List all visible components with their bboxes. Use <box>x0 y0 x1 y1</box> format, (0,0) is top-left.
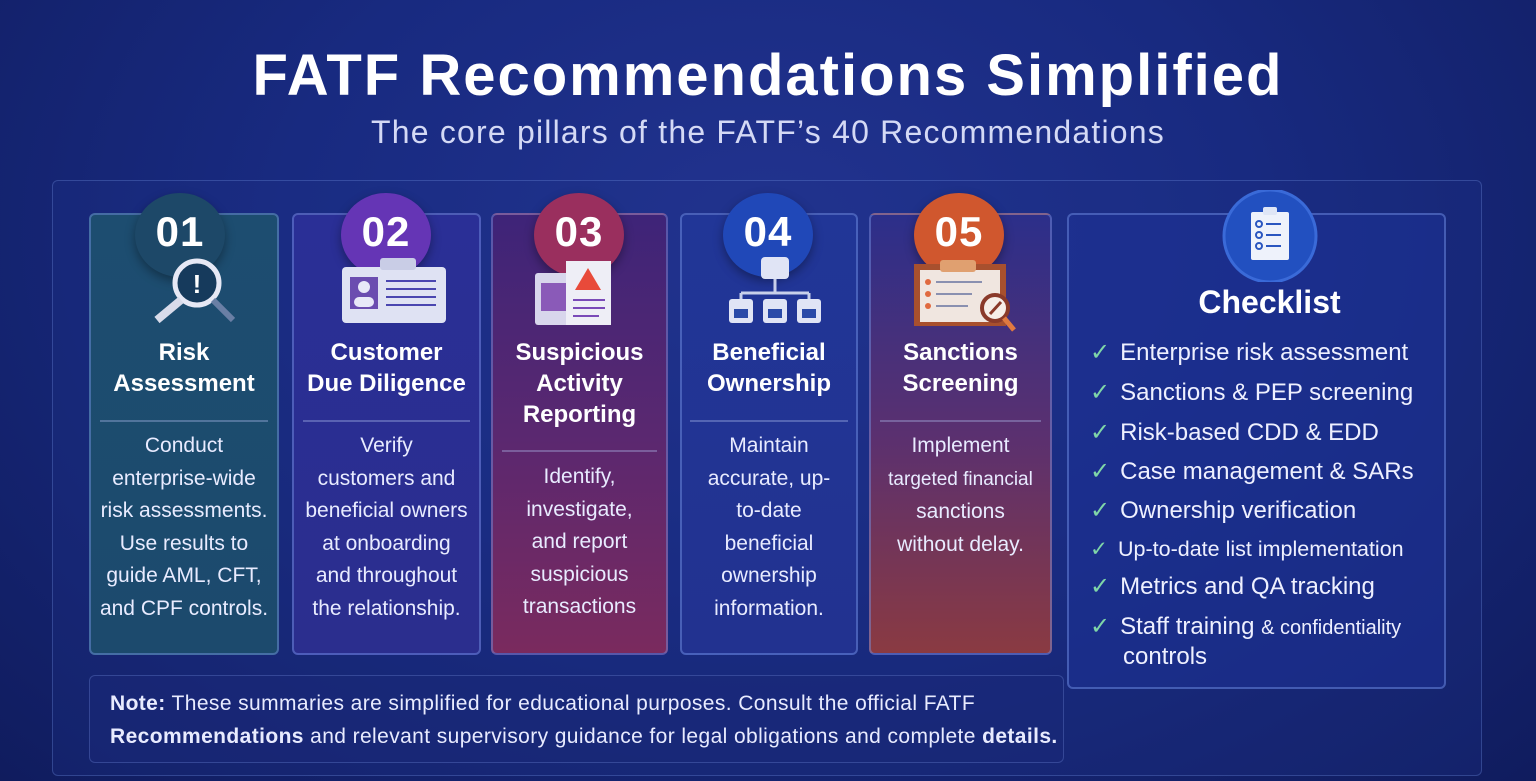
heading: checklist: Checklist <box>1198 284 1341 320</box>
panel: CDD <box>292 213 481 655</box>
text: ✓ Risk-based CDD & EDD <box>1090 419 1379 446</box>
text: ✓ Staff training & confidentiality <box>1090 613 1401 640</box>
badge 02 <box>341 193 431 277</box>
text: SAR: and report <box>532 530 627 553</box>
badge 05 <box>914 193 1004 277</box>
text: CDD: at onboarding <box>322 532 451 554</box>
text: CDD: beneficial owners <box>305 499 468 522</box>
heading: sanctions: Screening <box>902 370 1019 397</box>
text: risk <box>100 434 268 620</box>
badge 01 <box>135 193 225 277</box>
text: beneficial <box>708 434 830 620</box>
text: ✓ Ownership verification <box>1090 497 1356 524</box>
heading: SAR <box>515 339 644 428</box>
text: sanctions: sanctions <box>916 500 1005 523</box>
text: risk: and CPF controls. <box>100 596 268 620</box>
heading: risk <box>113 339 255 397</box>
panel: risk assessment <box>89 213 279 655</box>
heading: sanctions: Sanctions <box>903 339 1018 366</box>
badge 01: 01 <box>156 208 204 255</box>
text: beneficial: beneficial <box>725 532 813 554</box>
icon: magnifier <box>154 258 235 324</box>
checklist items <box>1090 339 1414 670</box>
text: risk: Conduct <box>145 434 223 457</box>
note box: Recommendations and relevant supervisory guidance for legal obligations and complete details. <box>110 725 1058 748</box>
text: SAR: investigate, <box>526 498 633 520</box>
icon: clipboard magnifier <box>914 260 1016 332</box>
text: beneficial: ownership <box>721 564 817 587</box>
panel: SAR <box>491 213 668 655</box>
heading: risk: Assessment <box>113 370 255 397</box>
panel: beneficial ownership <box>680 213 858 655</box>
text: risk: enterprise-wide <box>112 466 256 490</box>
text: ✓ Up-to-date list implementation <box>1090 537 1404 561</box>
icon: id card <box>342 258 446 323</box>
badge 04 <box>723 193 813 277</box>
heading: CDD: Customer <box>330 339 443 366</box>
text: ✓ Case management & SARs <box>1090 458 1414 485</box>
heading: beneficial: Beneficial <box>712 339 826 366</box>
text: beneficial: accurate, up- <box>708 466 830 490</box>
icon: magnifier: ! <box>193 269 201 299</box>
text: SAR: suspicious <box>530 562 629 586</box>
text: sanctions <box>888 434 1033 556</box>
note box <box>89 675 1064 763</box>
heading: SAR: Suspicious <box>515 339 644 366</box>
text: sanctions: without delay. <box>897 532 1024 556</box>
note box: Note: These summaries are simplified for educational purposes. Consult the official FATF <box>110 692 975 715</box>
text: sanctions: targeted financial <box>888 468 1033 490</box>
text: SAR: transactions <box>523 595 636 618</box>
icon: report alert <box>535 261 611 325</box>
icon: org chart <box>729 257 821 323</box>
heading: CDD <box>307 339 466 397</box>
text: CDD: customers and <box>318 466 455 490</box>
text: ✓ Enterprise risk assessment <box>1090 339 1408 366</box>
heading: beneficial: Ownership <box>707 370 831 397</box>
text: risk: guide AML, CFT, <box>106 564 262 587</box>
heading: sanctions <box>902 339 1019 397</box>
panel: sanctions <box>869 213 1052 655</box>
panel: checklist <box>1067 213 1446 689</box>
text: beneficial: information. <box>714 596 824 620</box>
icon: clipboard badge <box>1222 190 1318 282</box>
badge 04: 04 <box>744 208 792 255</box>
badge 02: 02 <box>362 208 410 255</box>
heading: CDD: Due Diligence <box>307 370 466 397</box>
heading: risk: Risk <box>159 339 209 366</box>
title: FATF Recommendations Simplified <box>253 43 1283 108</box>
text: CDD <box>305 434 468 620</box>
outer panel <box>52 180 1482 776</box>
badge 03: 03 <box>555 208 603 255</box>
heading: beneficial <box>707 339 831 397</box>
badge 03 <box>534 193 624 277</box>
text: SAR: Identify, <box>544 465 615 488</box>
text: controls <box>1123 643 1207 670</box>
subtitle: The core pillars of the FATF’s 40 Recommendations <box>371 114 1165 150</box>
heading: SAR: Activity <box>536 370 623 397</box>
text: risk: Use results to <box>120 532 248 554</box>
badge 05: 05 <box>935 208 983 255</box>
text: sanctions: Implement <box>911 434 1010 457</box>
text: CDD: and throughout <box>316 564 457 587</box>
text: SAR <box>523 465 636 618</box>
text: ✓ Sanctions & PEP screening <box>1090 379 1413 406</box>
text: CDD: the relationship. <box>312 596 461 620</box>
text: CDD: Verify <box>360 434 413 457</box>
text: beneficial: Maintain <box>729 434 809 457</box>
heading: SAR: Reporting <box>523 401 636 428</box>
text: beneficial: to-date <box>736 499 802 522</box>
text: risk: risk assessments. <box>101 499 267 522</box>
text: ✓ Metrics and QA tracking <box>1090 573 1375 600</box>
